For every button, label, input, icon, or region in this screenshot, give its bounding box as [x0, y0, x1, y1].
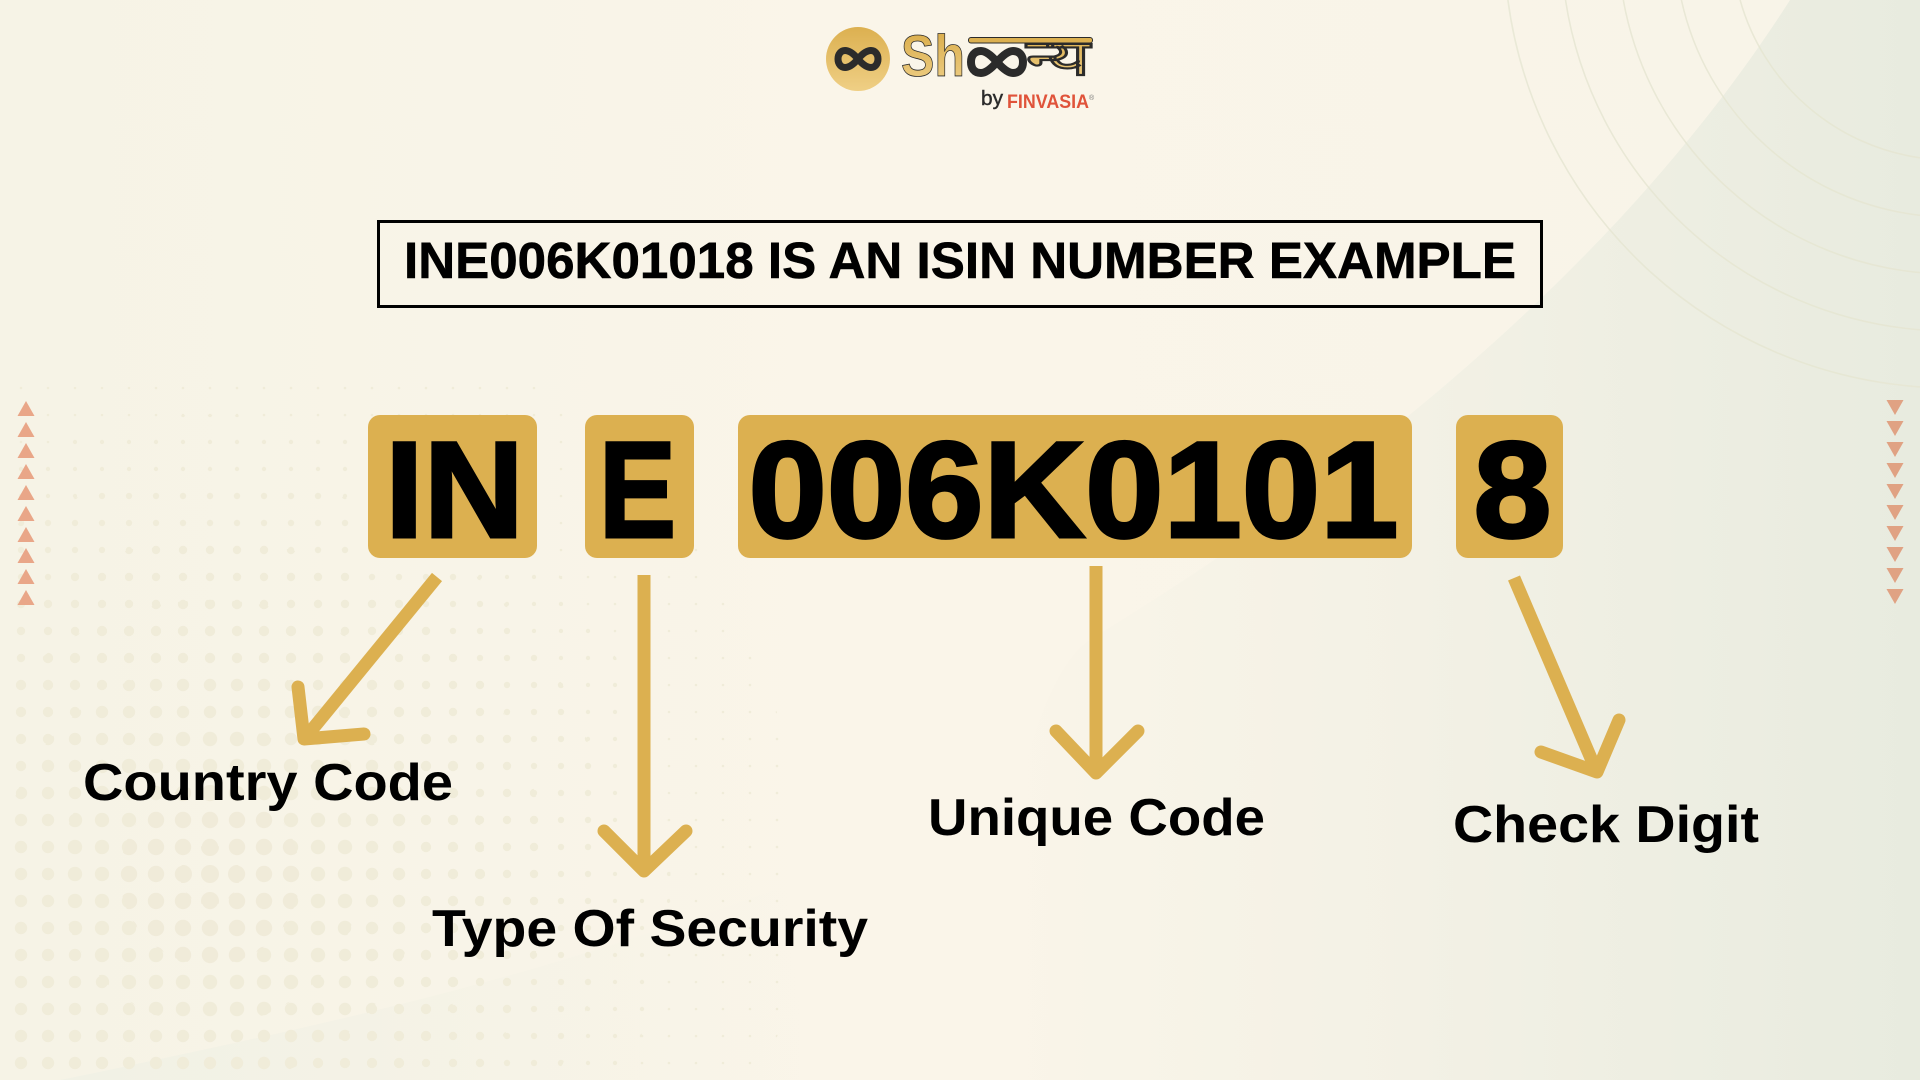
arrow: IN to Country Code	[298, 577, 437, 739]
logo wordmark: Sh	[901, 24, 965, 89]
title box	[378, 222, 1542, 306]
label: Type Of Security: Type Of Security	[432, 900, 868, 958]
security type segment: E: E	[599, 414, 676, 567]
logo byline: ®	[1089, 94, 1095, 102]
check digit segment: 8: 8	[1474, 414, 1552, 567]
decoration: left triangle column	[18, 401, 34, 605]
logo byline: by	[981, 88, 1003, 110]
country code segment: IN: IN	[385, 414, 524, 567]
logo byline	[981, 88, 1095, 113]
label: Check Digit: Check Digit	[1453, 796, 1759, 854]
label: Country Code: Country Code	[83, 754, 453, 812]
arrow: 006K0101 to Unique Code	[1056, 566, 1138, 773]
logo wordmark	[901, 24, 1093, 89]
unique code segment: 006K0101: 006K0101	[748, 414, 1398, 567]
logo: Shoonya by Finvasia	[826, 24, 1095, 113]
title: INE006K01018 IS AN ISIN NUMBER EXAMPLE	[404, 232, 1516, 289]
label: Unique Code: Unique Code	[928, 789, 1265, 847]
logo wordmark: न्य	[1025, 30, 1093, 86]
arrow: E to Type Of Security	[604, 575, 686, 871]
logo byline: FINVASIA	[1007, 92, 1089, 113]
icon: gold coin with infinity	[826, 27, 890, 91]
decoration: right triangle column	[1886, 400, 1904, 604]
arrow: 8 to Check Digit	[1514, 578, 1619, 772]
